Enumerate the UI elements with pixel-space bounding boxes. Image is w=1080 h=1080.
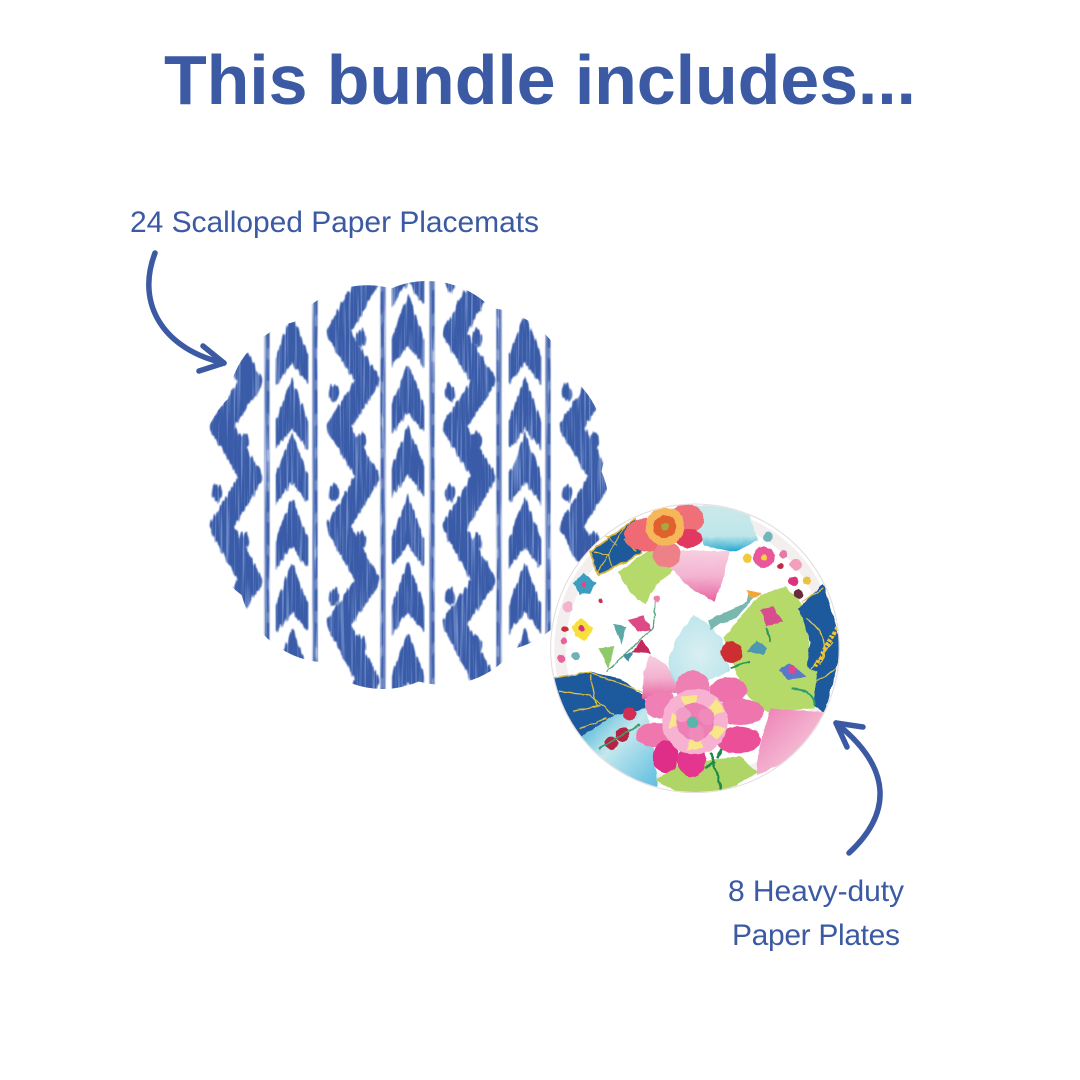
rim flowers left [558, 573, 603, 662]
plate base [551, 504, 839, 793]
rim flowers right [743, 532, 811, 599]
label: plates: Paper Plates [732, 919, 900, 952]
thin vertical stripes [267, 260, 549, 710]
bird [708, 590, 762, 630]
label: plates [728, 875, 904, 952]
label: placemats: 24 Scalloped Paper Placemats [130, 206, 539, 239]
chevron column left [276, 314, 308, 699]
red flower and blue sprig on green leaf [721, 607, 815, 705]
chevron column right [509, 314, 541, 699]
big green leaf right [723, 587, 823, 712]
blue leaf top left [590, 519, 642, 576]
salmon flower top [624, 504, 704, 567]
label: plates: 8 Heavy-duty [728, 875, 904, 908]
scalloped placemat with ikat pattern [208, 281, 608, 689]
pink leaf left of flower [642, 654, 677, 700]
red flowers lower left [598, 708, 640, 750]
blue leaf right [798, 583, 842, 713]
paper plate [551, 504, 842, 795]
arrow: to plate [836, 723, 880, 853]
stems [705, 748, 723, 790]
pink leaf top [668, 550, 730, 602]
blue leaf lower left [552, 672, 647, 738]
floral spray centre left [598, 596, 661, 672]
pale blue watercolour bottom left [580, 708, 657, 788]
green leaf bottom [655, 757, 758, 795]
pale blue leaf centre [668, 615, 730, 693]
arrow: to placemat [149, 253, 224, 371]
title: This bundle includes... [164, 41, 916, 119]
pink watercolour right bottom [757, 708, 825, 776]
zigzag columns [208, 352, 264, 610]
green leaf top [617, 550, 673, 604]
pale teal leaf top right [695, 505, 758, 552]
pink peony [636, 671, 764, 777]
chevron column centre [392, 234, 424, 703]
